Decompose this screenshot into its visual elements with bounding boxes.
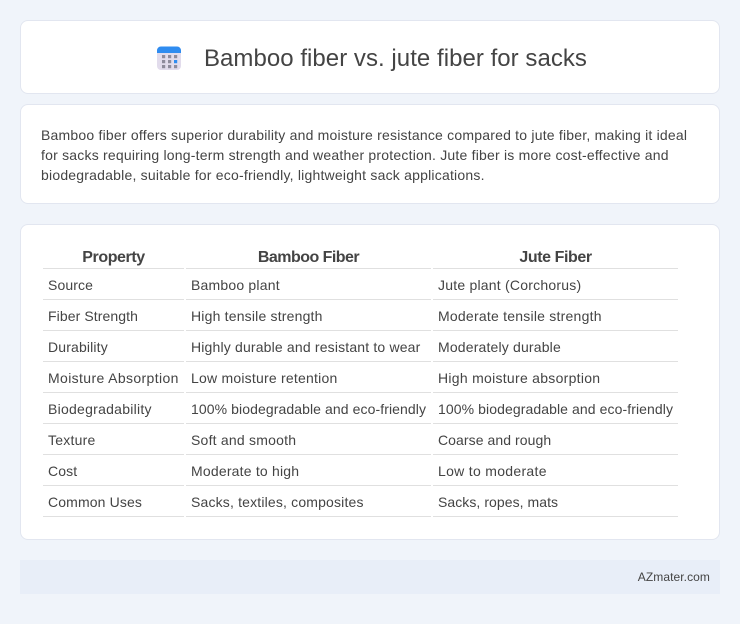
row: Cost: Moderate to high bbox=[191, 463, 299, 479]
row: Source bbox=[48, 277, 581, 293]
icon: calendar bbox=[157, 46, 181, 70]
header: Property: Property bbox=[82, 249, 145, 266]
row: Cost: Low to moderate bbox=[438, 463, 547, 479]
row: Common Uses: Sacks, ropes, mats bbox=[438, 494, 558, 510]
row: Fiber Strength: High tensile strength bbox=[191, 308, 323, 324]
row: Source: Bamboo plant bbox=[191, 277, 280, 293]
row: Common Uses: Sacks, textiles, composites bbox=[191, 494, 364, 510]
row: Biodegradability bbox=[48, 401, 673, 417]
row: Fiber Strength: Moderate tensile strength bbox=[438, 308, 602, 324]
row: Texture: Soft and smooth bbox=[191, 432, 296, 448]
row: Moisture Absorption bbox=[48, 370, 600, 386]
row: Durability bbox=[48, 339, 561, 355]
row: Texture bbox=[48, 432, 551, 448]
header: Bamboo Fiber: Bamboo Fiber bbox=[258, 249, 359, 266]
row: Moisture Absorption: Low moisture retention bbox=[191, 370, 337, 386]
row: Source: Source bbox=[48, 277, 93, 293]
row: Durability: Moderately durable bbox=[438, 339, 561, 355]
footer credit: AZmater.com bbox=[638, 570, 710, 584]
title panel bbox=[20, 20, 720, 94]
row: Fiber Strength bbox=[48, 308, 602, 324]
row: Durability: Highly durable and resistant to wear bbox=[191, 339, 420, 355]
row: Biodegradability: 100% biodegradable and eco-friendly bbox=[438, 401, 673, 417]
row: Cost: Cost bbox=[48, 463, 77, 479]
row: Common Uses bbox=[48, 494, 558, 510]
intro paragraph: Bamboo fiber offers superior durability and moisture resistance compared to jute fiber, making it ideal bbox=[41, 127, 687, 143]
intro paragraph bbox=[41, 127, 687, 183]
row: Common Uses: Common Uses bbox=[48, 494, 142, 510]
row: Texture: Texture bbox=[48, 432, 96, 448]
row: Cost bbox=[48, 463, 547, 479]
row: Durability: Durability bbox=[48, 339, 108, 355]
row: Biodegradability: Biodegradability bbox=[48, 401, 152, 417]
header: Jute Fiber: Jute Fiber bbox=[519, 249, 592, 266]
intro paragraph: biodegradable, suitable for eco-friendly, lightweight sack applications. bbox=[41, 167, 485, 183]
row: Moisture Absorption: High moisture absorption bbox=[438, 370, 600, 386]
row: Moisture Absorption: Moisture Absorption bbox=[48, 370, 179, 386]
intro paragraph: for sacks requiring long-term strength and weather protection. Jute fiber is more cost-effective and bbox=[41, 147, 669, 163]
comparison table panel bbox=[20, 224, 720, 540]
row: Biodegradability: 100% biodegradable and eco-friendly bbox=[191, 401, 426, 417]
row: Source: Jute plant (Corchorus) bbox=[438, 277, 581, 293]
row: Fiber Strength: Fiber Strength bbox=[48, 308, 138, 324]
intro text panel bbox=[20, 104, 720, 204]
title: Bamboo fiber vs. jute fiber for sacks bbox=[204, 45, 587, 72]
row: Texture: Coarse and rough bbox=[438, 432, 551, 448]
footer bar bbox=[20, 560, 720, 594]
